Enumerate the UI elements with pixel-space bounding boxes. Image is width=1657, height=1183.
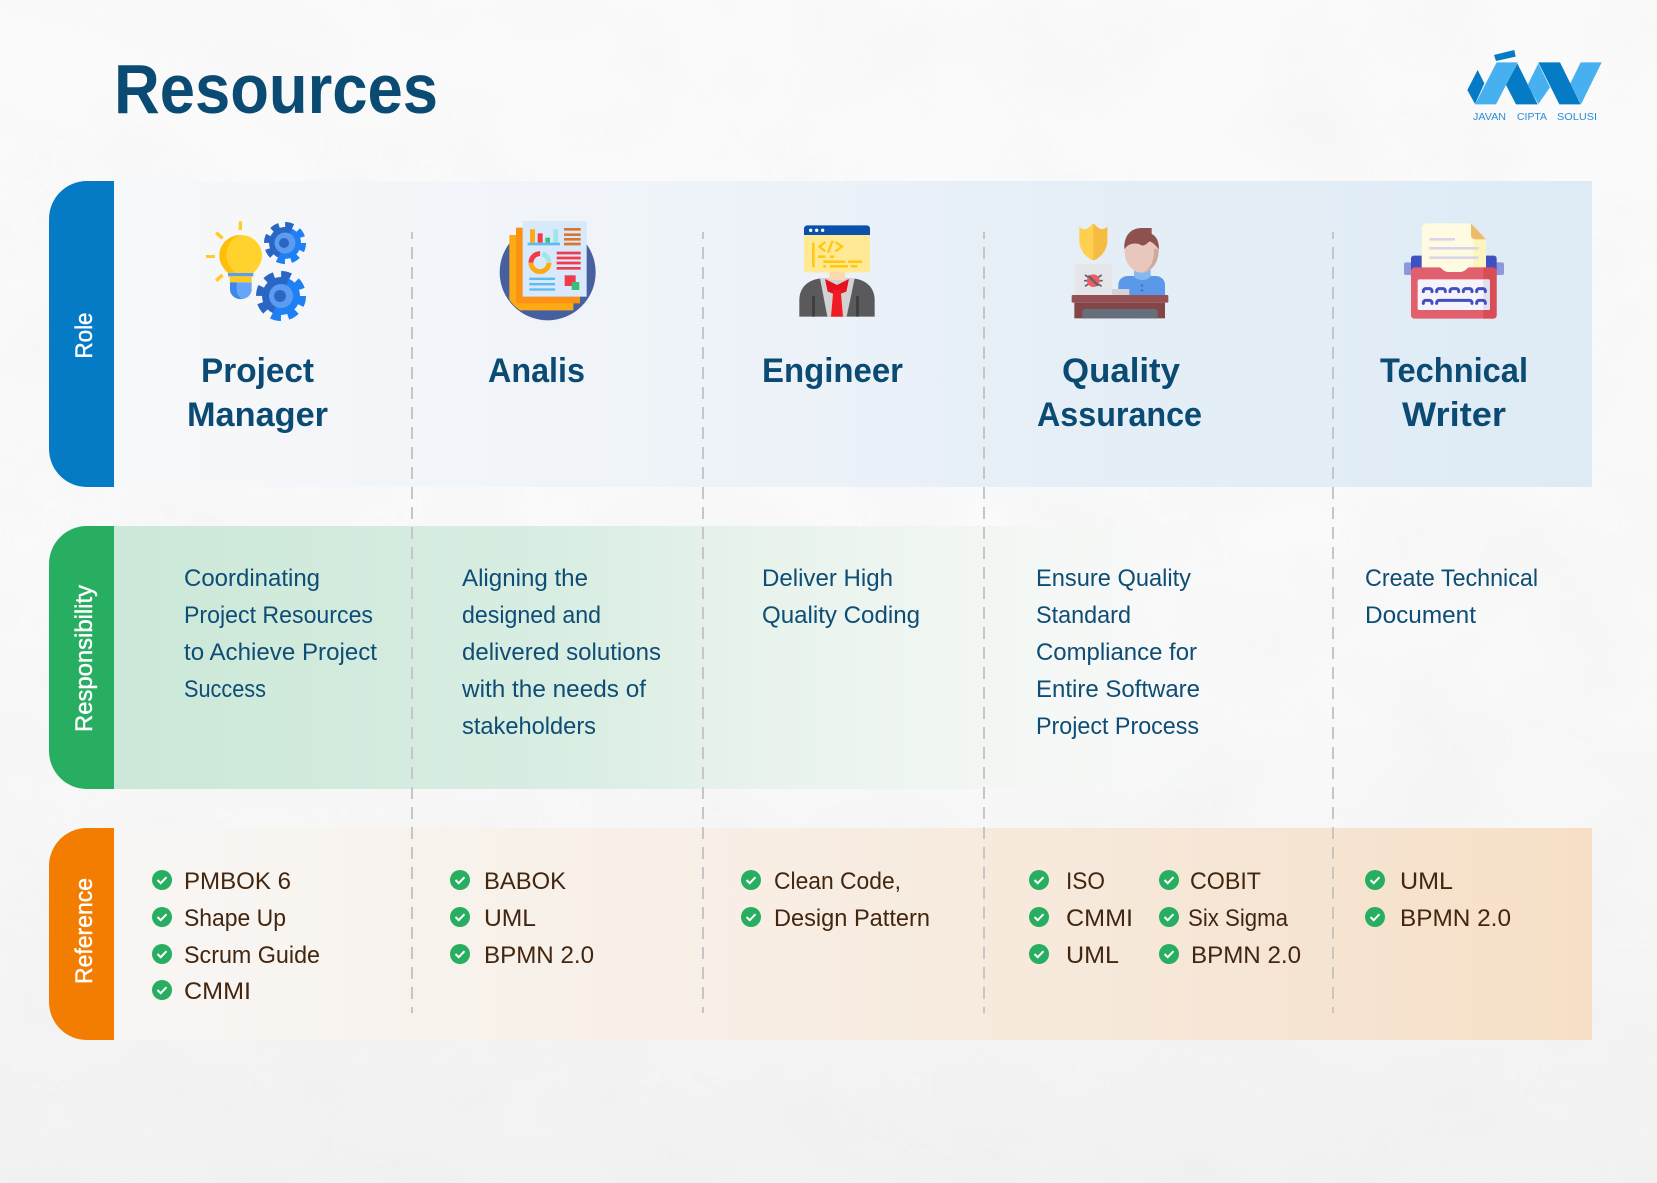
list: engineer references: Design Pattern <box>774 905 930 932</box>
list: analis references: UML <box>484 905 536 932</box>
list: quality assurance references: BPMN 2.0 <box>1191 942 1301 969</box>
list: analis references <box>450 868 594 969</box>
list: quality assurance references: UML <box>1066 942 1119 969</box>
role names: Manager <box>187 396 328 434</box>
icon: analyst report <box>500 221 596 320</box>
role tab <box>49 181 114 487</box>
role tab: Role <box>71 312 98 358</box>
role names: Assurance <box>1037 396 1202 434</box>
text: quality assurance responsibility <box>1036 565 1200 740</box>
list: technical writer references: UML <box>1400 868 1453 895</box>
icon: technical writer typewriter <box>1404 223 1504 319</box>
list: project manager references: PMBOK 6 <box>184 868 291 895</box>
logo: Javan Cipta Solusi: JAVAN <box>1473 112 1506 123</box>
role names: Analis <box>488 352 585 390</box>
list: analis references: BABOK <box>484 868 566 895</box>
title: Resources <box>114 50 438 128</box>
list: project manager references <box>152 868 320 1005</box>
list: quality assurance references: COBIT <box>1190 868 1261 895</box>
panel: reference <box>49 828 1592 1040</box>
role names: Quality <box>1062 352 1180 390</box>
text: engineer responsibility: Quality Coding <box>762 602 920 629</box>
text: project manager responsibility: to Achieve Project <box>184 639 377 666</box>
text: quality assurance responsibility: Ensure Quality <box>1036 565 1191 592</box>
list: engineer references <box>741 868 930 932</box>
text: quality assurance responsibility: Standard <box>1036 602 1131 629</box>
logo: Javan Cipta Solusi: CIPTA <box>1517 112 1547 123</box>
role names: Technical <box>1380 352 1528 390</box>
text: project manager responsibility <box>184 565 377 703</box>
icon: quality assurance person at desk <box>1072 223 1168 318</box>
text: project manager responsibility: Success <box>184 676 266 703</box>
panel: role <box>49 181 1592 487</box>
text: quality assurance responsibility: Entire Software <box>1036 676 1200 703</box>
text: analis responsibility: with the needs of <box>461 676 646 703</box>
text: quality assurance responsibility: Project Process <box>1036 713 1199 740</box>
text: technical writer responsibility: Document <box>1365 602 1476 629</box>
role names <box>187 352 1528 434</box>
list: project manager references: Shape Up <box>184 905 286 932</box>
text: quality assurance responsibility: Compliance for <box>1036 639 1197 666</box>
list: quality assurance references: ISO <box>1066 868 1105 895</box>
list: engineer references: Clean Code, <box>774 868 901 895</box>
icon: lightbulb and gears <box>206 221 302 316</box>
list: technical writer references: BPMN 2.0 <box>1400 905 1511 932</box>
logo: Javan Cipta Solusi: SOLUSI <box>1557 112 1597 123</box>
role names: Engineer <box>762 352 903 390</box>
reference tab: Reference <box>71 878 98 984</box>
reference tab <box>49 828 114 1040</box>
list: quality assurance references: CMMI <box>1066 905 1133 932</box>
text: analis responsibility <box>461 565 661 740</box>
logo: Javan Cipta Solusi <box>1467 50 1602 123</box>
panel: responsibility <box>49 526 1538 789</box>
text: analis responsibility: designed and <box>462 602 601 629</box>
list: technical writer references <box>1365 868 1511 932</box>
icon: engineer with code screen <box>799 225 875 317</box>
text: analis responsibility: delivered solutions <box>462 639 661 666</box>
list: project manager references: Scrum Guide <box>184 942 320 969</box>
text: engineer responsibility: Deliver High <box>762 565 893 592</box>
role names: Writer <box>1402 396 1506 434</box>
role names: Project <box>201 352 314 390</box>
text: project manager responsibility: Coordinating <box>184 565 320 592</box>
text: engineer responsibility <box>762 565 920 629</box>
responsibility tab <box>49 526 114 789</box>
text: technical writer responsibility <box>1365 565 1538 629</box>
list: project manager references: CMMI <box>184 978 251 1005</box>
responsibility tab: Responsibility <box>71 585 98 732</box>
list: analis references: BPMN 2.0 <box>484 942 594 969</box>
text: analis responsibility: stakeholders <box>462 713 596 740</box>
text: technical writer responsibility: Create Technical <box>1365 565 1538 592</box>
list: quality assurance references: Six Sigma <box>1188 905 1289 932</box>
list: quality assurance references <box>1029 868 1301 969</box>
text: analis responsibility: Aligning the <box>462 565 588 592</box>
text: project manager responsibility: Project Resources <box>184 602 373 629</box>
